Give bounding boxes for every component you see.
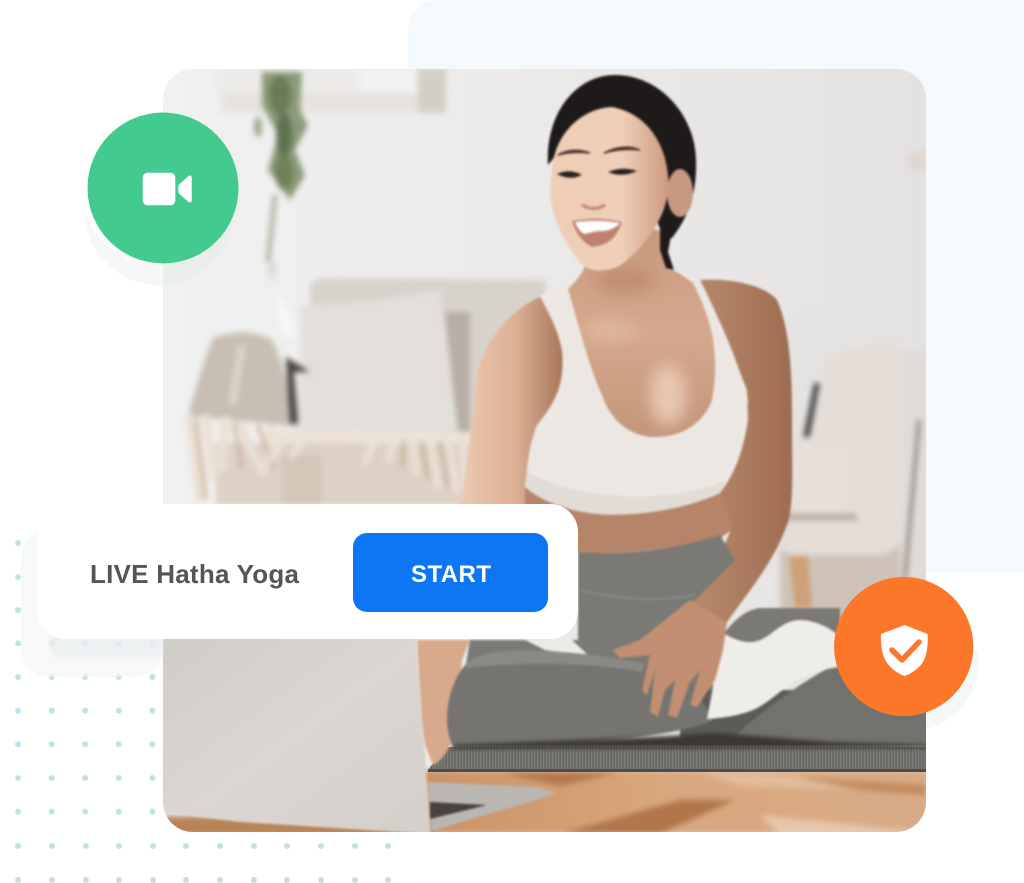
left thigh [446,664,712,747]
ponytail [660,228,674,270]
hanging plant [254,72,308,280]
green circle soft shadow [84,209,163,285]
white sock [707,620,838,719]
right arm [687,280,792,622]
person [417,75,930,765]
card drop shadow [21,530,163,677]
right pillow [778,310,845,437]
class title: LIVE Hatha Yoga [90,559,300,589]
dot grid pattern [0,540,391,883]
neck and chest [567,225,715,438]
ear [667,169,693,217]
lean pole [905,420,919,578]
orange circle soft shadow [926,650,979,729]
left arm [458,297,563,512]
live class card [37,504,578,639]
wall shelf [216,68,448,113]
orange security badge [834,577,973,716]
yoga mat [428,747,930,772]
pale blue background panel [408,0,1024,572]
white sports top [525,268,748,515]
hair back [548,75,696,240]
chair leg [789,556,812,608]
room furniture [188,68,930,620]
forearm reaching to keyboard [417,640,470,765]
face [550,107,668,271]
hand on knee [613,600,727,718]
eyes [557,169,637,178]
icon: video camera [143,173,192,205]
right lower leg [725,662,930,746]
icon: shield with check [881,625,928,676]
sofa back [310,278,546,440]
start button: START [411,561,491,588]
grey pants upper [465,535,840,700]
nose [582,205,605,208]
sofa seat [216,443,476,505]
throw blanket [188,332,292,426]
start button [353,533,548,612]
panel: yoga photo illustration [163,69,926,832]
eyebrows [558,147,640,155]
mat shadow [450,733,930,749]
green circle shadow on photo [82,133,234,285]
smile [572,219,622,247]
midriff [525,487,738,553]
wall background [163,69,926,832]
blanket fringe [190,418,468,498]
sofa pillow [294,290,458,433]
right wall shade [780,500,926,620]
wooden floor [163,770,930,836]
green video badge [88,112,238,264]
leg shadow fill [678,688,794,738]
armchair [780,345,902,557]
small sock [525,640,590,657]
wall lamp [908,151,926,172]
laptop [160,636,556,834]
